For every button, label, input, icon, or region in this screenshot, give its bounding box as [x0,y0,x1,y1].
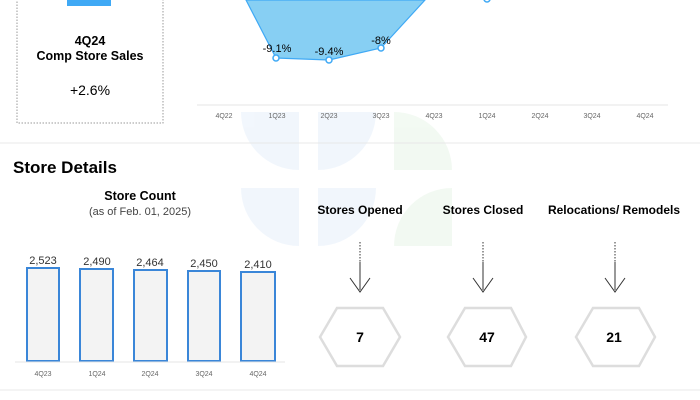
store count chart: 2Q24 [141,371,159,378]
store count chart: 4Q23 [34,371,52,378]
panel: comp store sales box: +2.6% [70,82,110,98]
store count chart: 1Q24 [88,371,106,378]
column: stores closed [443,203,526,366]
column: relocations [548,203,680,366]
area chart: 4Q23 [425,113,443,120]
column: stores closed: Stores Closed [443,203,523,217]
area chart: -9.4% [315,46,344,58]
column: stores opened: 7 [356,329,364,345]
store count chart: 2,450 [190,258,218,270]
area chart: 4Q22 [215,113,233,120]
area chart: 3Q24 [583,113,601,120]
area chart: -9.1% [263,43,292,55]
store count chart: 2,464 [136,257,164,269]
store count chart: Store Count [104,189,177,203]
store count chart: 3Q24 [195,371,213,378]
column: relocations: 21 [606,329,622,345]
area chart: 2Q23 [320,113,338,120]
store count chart: 2,523 [29,255,57,267]
area chart: -8% [371,35,391,47]
area chart: 1Q23 [268,113,286,120]
store count chart: 2,410 [244,259,272,271]
store count chart: 4Q24 [249,371,267,378]
store count chart [15,189,285,378]
panel: comp store sales box: Comp Store Sales [37,49,144,63]
column: relocations: Relocations/ Remodels [548,203,680,217]
heading: Store Details: Store Details [13,158,117,177]
watermark logo [241,112,452,246]
area chart: 4Q24 [636,113,654,120]
area chart: 3Q23 [372,113,390,120]
panel: comp store sales box [17,0,163,123]
panel: comp store sales box: 4Q24 [75,34,105,48]
column: stores opened: Stores Opened [317,203,403,217]
column: stores opened [317,203,403,366]
store count chart: 2,490 [83,256,111,268]
area chart [197,0,668,120]
area chart: 1Q24 [478,113,496,120]
area chart: 2Q24 [531,113,549,120]
column: stores closed: 47 [479,329,495,345]
store count chart: (as of Feb. 01, 2025) [89,206,191,218]
